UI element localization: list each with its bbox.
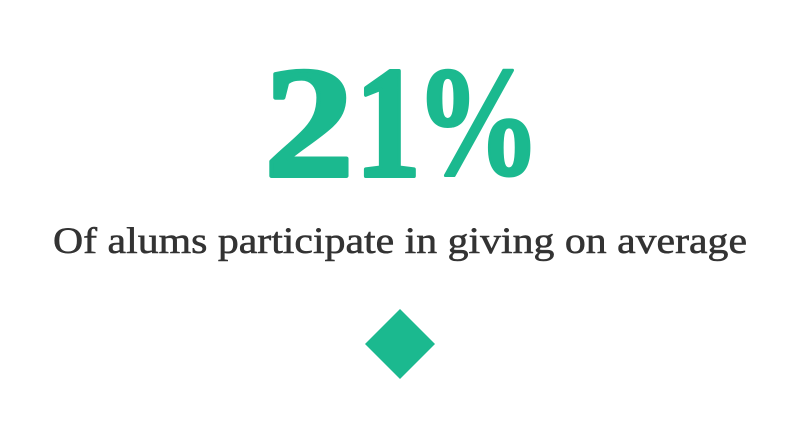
big statistic: 21%: 1 <box>355 35 421 211</box>
icon: diamond <box>365 309 435 379</box>
caption: Of alums participate in giving on average <box>53 221 747 262</box>
big statistic: 21%: 2 <box>264 35 354 211</box>
big statistic: 21% <box>264 35 541 211</box>
big statistic: 21%: % <box>415 35 541 208</box>
